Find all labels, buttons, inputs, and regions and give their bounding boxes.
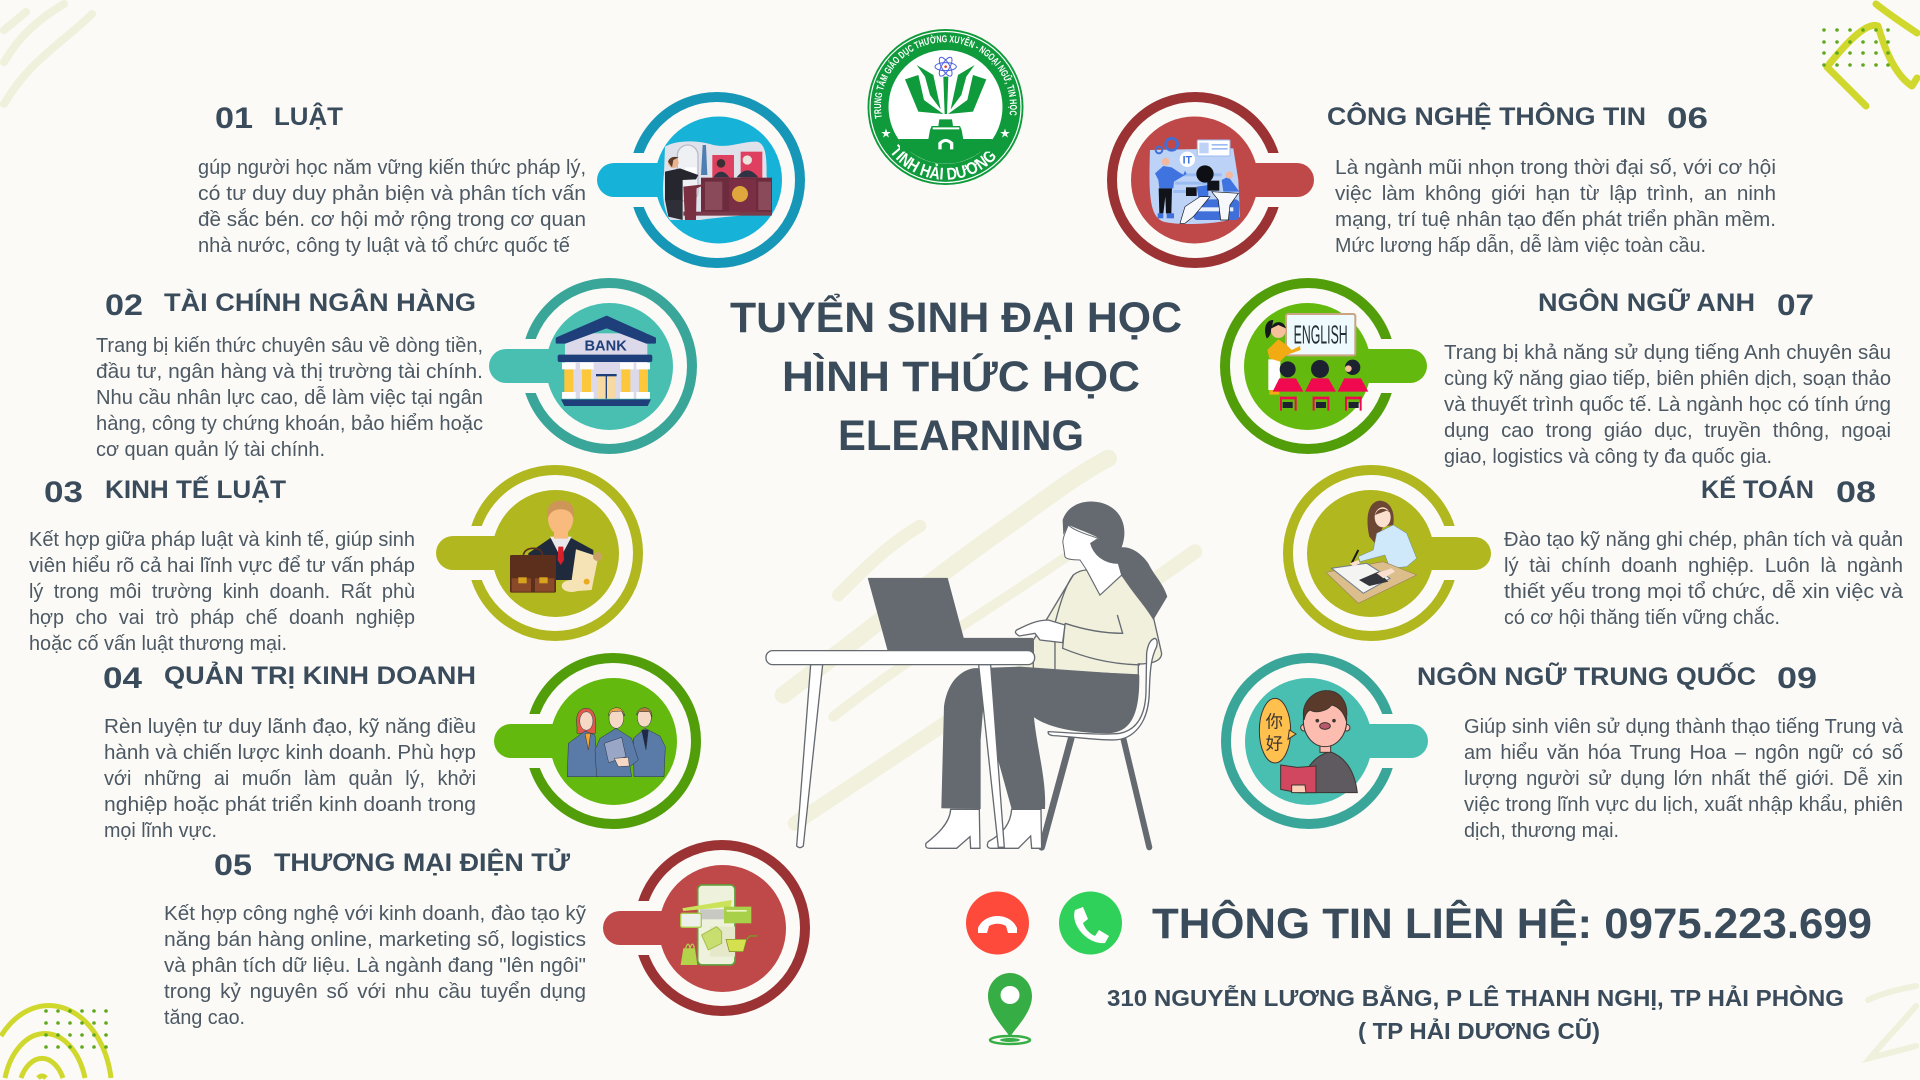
description 02: Nhu cầu nhân lực cao, dễ làm việc tại ngân xyxy=(96,386,483,409)
description 09: lượng người sử dụng lớn nhất thế giới. Dễ xin xyxy=(1464,767,1903,790)
decoration: top left scribble xyxy=(4,4,92,104)
description 07: dụng cao trong giáo dục, truyền thông, ngoại xyxy=(1444,420,1891,442)
logo: Trung tâm giáo dục thường xuyên tỉnh Hải Dương: TỈNH HẢI DƯƠNG xyxy=(892,144,996,180)
icon: Chinese speaker in teal ring: 你 xyxy=(1266,712,1283,732)
description 08: có cơ hội thăng tiến vững chắc. xyxy=(1504,606,1780,629)
description 04: với những ai muốn làm quản lý, khởi xyxy=(104,768,476,790)
description 05: tăng cao. xyxy=(164,1007,245,1029)
panel: 05 Thương mại điện tử xyxy=(164,845,805,1029)
heading: Ngôn ngữ Anh: NGÔN NGỮ ANH xyxy=(1538,287,1755,317)
contact: address: 310 NGUYỄN LƯƠNG BẰNG, P LÊ THANH NGHỊ, TP HẢI PHÒNG xyxy=(1107,983,1844,1011)
number 01: 01 xyxy=(215,102,253,135)
number 07: 07 xyxy=(1777,289,1814,322)
icon: Chinese speaker in teal ring xyxy=(1226,658,1428,824)
decoration: top right zigzag and dots xyxy=(1822,4,1917,106)
description 02 xyxy=(96,335,483,461)
contact: answer phone icon xyxy=(1059,892,1122,954)
description 04: Rèn luyện tư duy lãnh đạo, kỹ năng điều xyxy=(104,716,476,738)
panel: 04 Quản trị kinh doanh xyxy=(103,658,696,842)
description 08: Đào tạo kỹ năng ghi chép, phân tích và quản xyxy=(1504,529,1903,551)
description 07: cùng kỹ năng giao tiếp, biên phiên dịch, soạn thảo xyxy=(1444,368,1891,390)
description 01: gúp người học năm vững kiến thức pháp lý, xyxy=(198,157,586,179)
description 06: Là ngành mũi nhọn trong thời đại số, với cơ hội xyxy=(1335,157,1776,179)
number 03: 03 xyxy=(44,476,83,509)
description 09 xyxy=(1464,716,1904,842)
description 05 xyxy=(164,903,586,1029)
panel: 09 Ngôn ngữ Trung Quốc xyxy=(1226,658,1904,842)
icon: location pin xyxy=(988,973,1032,1044)
logo: Trung tâm giáo dục thường xuyên tỉnh Hải Dương: ★ xyxy=(1000,129,1010,140)
number 04: 04 xyxy=(103,662,142,695)
decoration: bottom left concentric arcs and dots xyxy=(1,1006,111,1078)
description 02: hàng, công ty chứng khoán, bảo hiểm hoặc xyxy=(96,413,483,435)
icon: IT team in dark red ring: IT xyxy=(1183,154,1193,166)
description 02: Trang bị kiến thức chuyên sâu về dòng tiền, xyxy=(96,335,483,357)
number 09: 09 xyxy=(1777,662,1817,695)
description 09: am hiểu văn hóa Trung Hoa – ngôn ngữ có số xyxy=(1464,742,1903,764)
icon: lawyer with briefcase in olive ring xyxy=(436,470,638,636)
description 05: và phân tích dữ liệu. Là ngành đang "lên ngôi" xyxy=(164,955,586,977)
icon: English classroom in green ring: ENGLISH xyxy=(1294,319,1348,349)
panel: 08 Kế toán xyxy=(1288,470,1904,636)
description 03 xyxy=(29,529,415,655)
icon: courtroom in blue ring xyxy=(597,97,800,263)
description 05: trong kỷ nguyên số với nhu cầu tuyển dụng xyxy=(164,981,586,1003)
description 04: hành và chiến lược kinh doanh. Phù hợp xyxy=(104,742,476,764)
description 09: dịch, thương mại. xyxy=(1464,820,1619,842)
panel: 06 Công nghệ thông tin xyxy=(1112,97,1776,263)
description 04: mọi lĩnh vực. xyxy=(104,820,217,842)
description 03: lý trong môi trường kinh doanh. Rất phù xyxy=(29,581,415,603)
description 01: nhà nước, công ty luật và tổ chức quốc tế xyxy=(198,235,570,257)
description 03: hợp cho vai trò pháp chế doanh nghiệp xyxy=(29,607,415,629)
number 02: 02 xyxy=(105,289,143,322)
heading: Công nghệ thông tin: CÔNG NGHỆ THÔNG TIN xyxy=(1327,101,1646,131)
description 04 xyxy=(104,716,476,842)
contact: address xyxy=(1107,983,1844,1044)
icon: mobile shop in red ring xyxy=(603,845,805,1011)
heading: Kinh tế luật: KINH TẾ LUẬT xyxy=(105,474,286,504)
icon: three managers in green ring xyxy=(494,658,696,824)
heading: Luật: LUẬT xyxy=(274,101,343,131)
heading: Tài chính ngân hàng: TÀI CHÍNH NGÂN HÀNG xyxy=(164,287,476,317)
description 06 xyxy=(1335,157,1776,257)
logo: Trung tâm giáo dục thường xuyên tỉnh Hải Dương xyxy=(868,29,1024,185)
panel: 03 Kinh tế luật xyxy=(29,470,638,655)
number 05: 05 xyxy=(214,849,252,882)
description 01: có tư duy duy phản biện và phân tích vấn xyxy=(198,183,586,205)
description 09: Giúp sinh viên sử dụng thành thạo tiếng Trung và xyxy=(1464,716,1904,738)
description 02: đầu tư, ngân hàng và thị trường tài chính. xyxy=(96,361,483,383)
number 08: 08 xyxy=(1836,476,1876,509)
decoration: bottom right scribble xyxy=(1868,986,1916,1058)
number 06: 06 xyxy=(1667,102,1708,135)
description 05: Kết hợp công nghệ với kinh doanh, đào tạo kỹ xyxy=(164,903,586,925)
description 07: Trang bị khả năng sử dụng tiếng Anh chuyên sâu xyxy=(1444,342,1891,364)
logo: Trung tâm giáo dục thường xuyên tỉnh Hải Dương: ★ xyxy=(881,129,891,140)
description 01 xyxy=(198,157,586,257)
description 09: việc trong lĩnh vực du lịch, xuất nhập khẩu, phiên xyxy=(1464,794,1903,816)
description 08 xyxy=(1504,529,1904,629)
description 05: năng bán hàng online, marketing số, logistics xyxy=(164,929,586,951)
heading: Thương mại điện tử: THƯƠNG MẠI ĐIỆN TỬ xyxy=(274,847,570,877)
description 02: cơ quan quản lý tài chính. xyxy=(96,439,325,461)
title xyxy=(730,293,1182,460)
description 08: thiết yếu trong mọi tổ chức, dễ xin việc và xyxy=(1504,580,1904,603)
heading: Quản trị kinh doanh: QUẢN TRỊ KINH DOANH xyxy=(164,660,476,690)
description 03: Kết hợp giữa pháp luật và kinh tế, giúp sinh xyxy=(29,529,415,551)
icon: English classroom in green ring xyxy=(1225,283,1427,449)
panel: 02 Tài chính ngân hàng xyxy=(96,283,692,461)
contact: phone number: THÔNG TIN LIÊN HỆ: 0975.223.699 xyxy=(1152,899,1872,948)
description 08: lý tài chính doanh nghiệp. Luôn là ngành xyxy=(1504,555,1903,577)
panel: 07 Ngôn ngữ Anh xyxy=(1225,283,1891,468)
description 06: Mức lương hấp dẫn, dễ làm việc toàn cầu. xyxy=(1335,234,1706,257)
title: HÌNH THỨC HỌC xyxy=(782,352,1140,401)
description 03: hoặc cố vấn luật thương mại. xyxy=(29,633,287,655)
heading: Ngôn ngữ Trung Quốc: NGÔN NGỮ TRUNG QUỐC xyxy=(1417,661,1756,691)
description 07: và thuyết trình quốc tế. Là ngành học có tính ứng xyxy=(1444,394,1891,416)
description 07 xyxy=(1444,342,1891,468)
icon: bank in teal ring xyxy=(489,283,692,449)
title: TUYỂN SINH ĐẠI HỌC xyxy=(730,293,1182,342)
description 06: việc làm không giới hạn từ lập trình, an ninh xyxy=(1335,183,1776,205)
contact: hang-up phone icon xyxy=(966,892,1029,954)
icon: Chinese speaker in teal ring: 好 xyxy=(1266,733,1283,753)
description 04: nghiệp hoặc phát triển kinh doanh trong xyxy=(104,794,476,816)
description 01: đề sắc bén. cơ hội mở rộng trong cơ quan xyxy=(198,208,586,231)
description 07: giao, logistics và công ty đa quốc gia. xyxy=(1444,446,1772,468)
icon: bank in teal ring: BANK xyxy=(584,338,627,354)
contact: address: ( TP HẢI DƯƠNG CŨ) xyxy=(1358,1016,1600,1044)
heading: Kế toán: KẾ TOÁN xyxy=(1701,475,1814,504)
title: ELEARNING xyxy=(838,412,1084,460)
icon: accountant in olive ring xyxy=(1288,470,1491,636)
description 03: viên hiểu rõ cả hai lĩnh vực để tư vấn pháp xyxy=(29,555,415,577)
panel: 01 Luật xyxy=(198,97,800,263)
logo: Trung tâm giáo dục thường xuyên tỉnh Hải Dương: TRUNG TÂM GIÁO DỤC THƯỜNG XUYÊN - NGOẠI NGỮ, TIN HỌC xyxy=(874,34,1017,119)
illustration: woman working on a laptop xyxy=(766,458,1195,848)
description 06: mạng, trí tuệ nhân tạo đến phát triển phần mềm. xyxy=(1335,209,1776,231)
icon: IT team in dark red ring xyxy=(1112,97,1314,263)
